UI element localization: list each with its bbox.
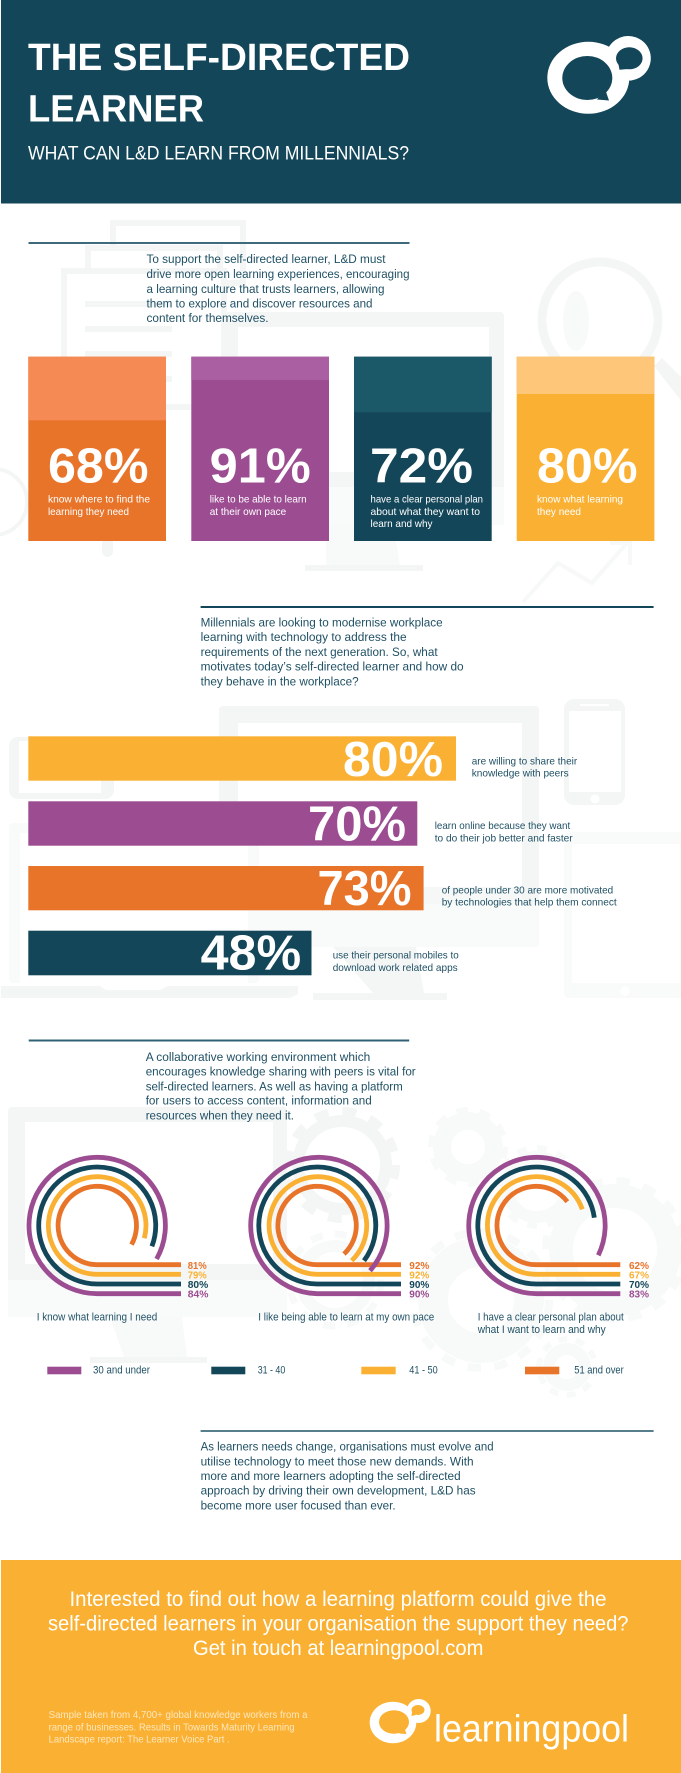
call to action: Interested to find out how a learning platform could give the xyxy=(70,1588,606,1611)
stat card: 68%: know where to find the xyxy=(48,494,150,506)
section two text block: requirements of the next generation. So, what xyxy=(201,645,438,659)
bar: 73% under 30: by technologies that help them connect xyxy=(442,897,617,909)
section three text block: resources when they need it. xyxy=(146,1108,294,1122)
radial chart: I know what learning I need: 79% xyxy=(188,1270,207,1282)
icon: gear centre xyxy=(498,1148,576,1226)
stat card: 72% xyxy=(354,357,492,541)
call to action: self-directed learners in your organisation the support they need? xyxy=(48,1613,628,1636)
stat card: 91% xyxy=(191,357,329,541)
bar: 73% under 30: 73% xyxy=(318,862,412,916)
radial chart: I have a clear personal plan: 83% xyxy=(629,1289,650,1301)
bar: 73% under 30: of people under 30 are more motivated xyxy=(442,885,613,897)
bar: 70% learn online xyxy=(28,798,573,852)
legend: 31 - 40 xyxy=(258,1364,285,1376)
icon: phone xyxy=(564,699,625,805)
stat card: 80%: know what learning xyxy=(537,494,623,506)
radial chart: I like being able to learn at my own pace: 90% xyxy=(409,1279,430,1291)
stat card: 72%: 72% xyxy=(370,440,473,494)
stat card: 68%: learning they need xyxy=(48,506,129,518)
title: THE SELF-DIRECTED xyxy=(28,37,410,79)
section three rule xyxy=(29,1040,409,1042)
bar: 48% personal mobiles: 48% xyxy=(201,926,301,980)
icon: upright tablet xyxy=(564,832,681,998)
icon: gear bottom xyxy=(413,1232,549,1368)
bar: 80% share knowledge: knowledge with peers xyxy=(472,768,569,780)
icon: learningpool logo mark xyxy=(370,1699,431,1743)
call to action xyxy=(48,1588,628,1660)
radial chart: I like being able to learn at my own pace: 90% xyxy=(409,1289,430,1301)
icon: gear small lower xyxy=(539,1339,595,1395)
section two text block: Millennials are looking to modernise workplace xyxy=(201,616,443,630)
footer panel xyxy=(1,1560,681,1773)
section two text block xyxy=(201,616,464,688)
stat card: 72%: about what they want to xyxy=(370,506,480,518)
stat card: 91%: at their own pace xyxy=(210,506,286,518)
radial chart: I have a clear personal plan xyxy=(469,1157,650,1336)
stat card: 80% xyxy=(517,357,654,541)
radial chart: I have a clear personal plan: 62% xyxy=(629,1260,650,1272)
source note: range of businesses. Results in Towards Maturity Learning xyxy=(49,1722,295,1734)
call to action: Get in touch at learningpool.com xyxy=(193,1637,483,1660)
background icons: section one xyxy=(0,223,681,602)
stat card: 80%: they need xyxy=(537,506,581,518)
legend: 41 - 50 xyxy=(409,1364,438,1376)
icon: document stack xyxy=(64,223,243,407)
icon: desktop monitor left xyxy=(8,1107,287,1363)
source note: Sample taken from 4,700+ global knowledge workers from a xyxy=(49,1709,308,1721)
icon: gear right xyxy=(546,1181,681,1319)
background icons: section three xyxy=(8,1107,681,1395)
section three text block: self-directed learners. As well as having a platform xyxy=(146,1079,403,1093)
section two text block: motivates today’s self-directed learner and how do xyxy=(201,660,464,674)
section two text block: learning with technology to address the xyxy=(201,630,407,644)
icon: gear left lower xyxy=(289,1234,381,1326)
section four text block: become more user focused than ever. xyxy=(201,1498,396,1512)
logo wordmark: learningpool xyxy=(434,1709,629,1751)
stat card: 91%: 91% xyxy=(210,440,311,494)
title: LEARNER xyxy=(28,89,204,131)
section four rule xyxy=(201,1430,654,1432)
section four text block: more and more learners adopting the self-directed xyxy=(201,1469,461,1483)
stat card: 68%: 68% xyxy=(48,440,148,494)
section four text block xyxy=(201,1440,494,1512)
radial chart: I have a clear personal plan: I have a clear personal plan about xyxy=(478,1312,624,1324)
radial chart: I like being able to learn at my own pace: 92% xyxy=(409,1260,430,1272)
radial chart: I know what learning I need: 84% xyxy=(188,1289,209,1301)
stat card: 72%: learn and why xyxy=(370,518,433,530)
legend: 30 and under xyxy=(93,1364,150,1376)
stat card: 80%: 80% xyxy=(537,440,638,494)
bar: 80% share knowledge xyxy=(28,733,578,787)
stat card: 72%: have a clear personal plan xyxy=(370,494,483,506)
intro text block xyxy=(146,252,410,325)
intro text block: content for themselves. xyxy=(146,311,268,325)
radial chart: I like being able to learn at my own pace: 92% xyxy=(409,1270,430,1282)
icon: large monitor xyxy=(219,706,539,1000)
radial chart: I know what learning I need xyxy=(29,1157,209,1324)
source note: Landscape report: The Learner Voice Part . xyxy=(49,1734,230,1746)
section three text block: A collaborative working environment which xyxy=(146,1050,370,1064)
legend xyxy=(47,1364,624,1376)
icon: magnifying glass xyxy=(542,262,681,412)
icon: speech bubble logo xyxy=(547,36,651,114)
subtitle: WHAT CAN L&D LEARN FROM MILLENNIALS? xyxy=(28,142,409,164)
intro text block: a learning culture that trusts learners, allowing xyxy=(146,282,384,296)
icon: laptop xyxy=(1,823,298,998)
section three text block: encourages knowledge sharing with peers is vital for xyxy=(146,1065,416,1079)
radial chart: I have a clear personal plan: 70% xyxy=(629,1279,650,1291)
header panel xyxy=(1,0,681,204)
radial chart: I know what learning I need: I know what learning I need xyxy=(37,1312,157,1324)
title xyxy=(28,37,410,131)
bar: 73% under 30 xyxy=(28,862,617,916)
legend: 51 and over xyxy=(574,1364,624,1376)
icon: desktop monitor xyxy=(221,312,504,571)
bar: 48% personal mobiles: use their personal mobiles to xyxy=(333,950,459,962)
icon: sideways tablet xyxy=(9,737,114,799)
section four text block: utilise technology to meet those new demands. With xyxy=(201,1454,474,1468)
section three text block: for users to access content, information and xyxy=(146,1094,372,1108)
intro text block: drive more open learning experiences, encouraging xyxy=(146,267,410,281)
radial chart: I have a clear personal plan: what I want to learn and why xyxy=(477,1324,606,1336)
section two rule xyxy=(201,606,654,608)
icon: capsule xyxy=(102,538,113,557)
radial chart: I like being able to learn at my own pace: I like being able to learn at my own pace xyxy=(258,1312,434,1324)
stat card: 91%: like to be able to learn xyxy=(210,494,307,506)
section two text block: they behave in the workplace? xyxy=(201,674,359,688)
intro text block: To support the self-directed learner, L&D must xyxy=(146,252,386,266)
background icons: section two xyxy=(1,699,681,1000)
intro rule xyxy=(28,242,410,244)
bar: 70% learn online: to do their job better and faster xyxy=(435,832,573,844)
section four text block: As learners needs change, organisations must evolve and xyxy=(201,1440,494,1454)
intro text block: them to explore and discover resources and xyxy=(146,296,372,310)
icon: rising line chart xyxy=(523,543,630,602)
radial chart: I know what learning I need: 80% xyxy=(188,1279,209,1291)
source note xyxy=(49,1709,308,1746)
bar: 70% learn online: learn online because they want xyxy=(435,820,570,832)
stat card: 68% xyxy=(28,357,166,541)
bar: 48% personal mobiles: download work related apps xyxy=(333,962,458,974)
radial chart: I like being able to learn at my own pace xyxy=(251,1157,434,1324)
bar: 80% share knowledge: are willing to share their xyxy=(472,755,578,767)
icon: magnifier arc at left edge xyxy=(0,469,27,535)
radial chart: I have a clear personal plan: 67% xyxy=(629,1270,650,1282)
section four text block: approach by driving their own development, L&D has xyxy=(201,1484,476,1498)
bar: 48% personal mobiles xyxy=(28,926,459,980)
icon: gear top xyxy=(431,1110,505,1184)
bar: 70% learn online: 70% xyxy=(308,798,406,852)
bar: 80% share knowledge: 80% xyxy=(343,733,443,787)
icon: gear behind middle chart xyxy=(288,1111,396,1219)
radial chart: I know what learning I need: 81% xyxy=(188,1260,207,1272)
section three text block xyxy=(146,1050,416,1122)
